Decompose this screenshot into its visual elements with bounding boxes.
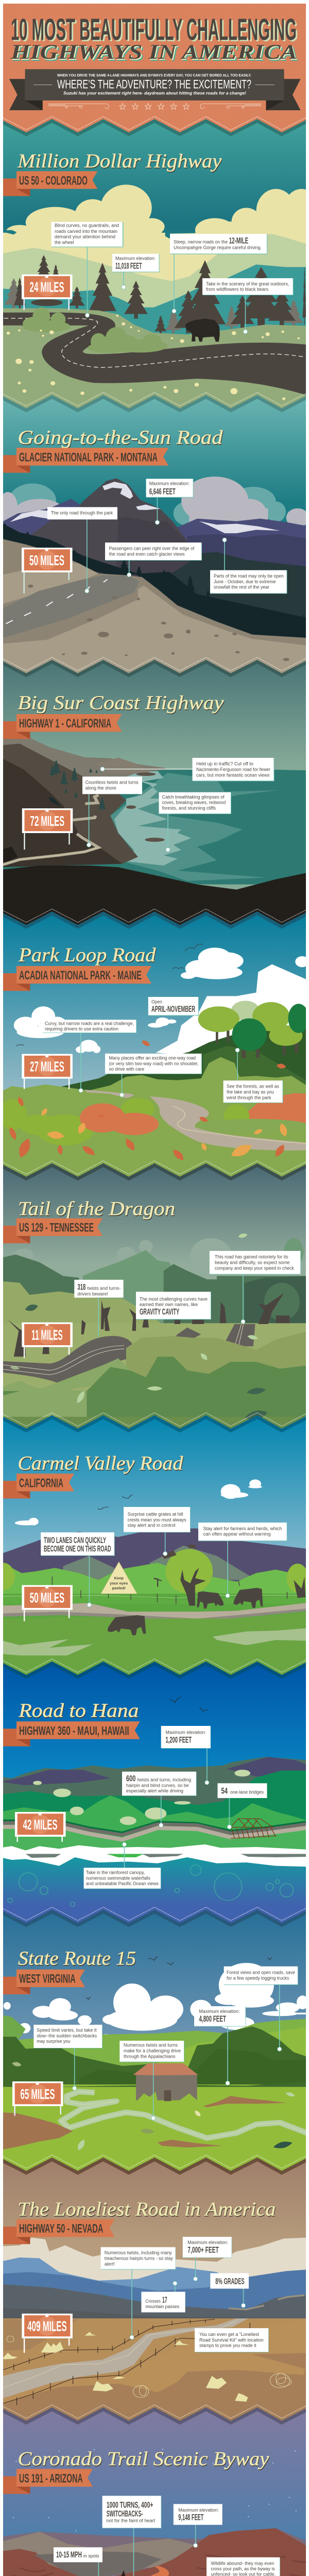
scene: Arizona canyon at dusk	[0, 2449, 309, 2576]
callout: maximum elevation 9,148 feet: 9,148 FEET	[178, 2513, 203, 2522]
panel: Carmel Valley Road	[0, 1453, 309, 1704]
sign: 409 miles	[22, 2313, 73, 2353]
callout: see the forests	[224, 1048, 283, 1103]
banner: Highway 360 - Maui, Hawaii	[3, 1721, 140, 1747]
title	[10, 19, 298, 61]
callout: 600 twists: hairpin and blind curves, so be	[126, 1783, 189, 1788]
callout: gravity cavity	[136, 1292, 211, 1319]
callout: 1000 turns: SWITCHBACKS-	[107, 2509, 143, 2518]
callout: cattle grates: crests mean you must always	[128, 1517, 186, 1522]
callout: blind curves: Blind curves, no guardrails, and	[55, 223, 119, 228]
banner: West Virginia: WEST VIRGINIA	[19, 1972, 76, 1986]
callout: one-way road	[105, 1054, 202, 1097]
callout: blind curves: roads carved into the mountain	[55, 229, 117, 234]
callout: survival kit: You can even get a “Loneliest	[199, 2332, 259, 2337]
panel: header	[3, 4, 306, 132]
callout: maximum elevation 4,800 feet: Maximum elevation:	[199, 2009, 240, 2014]
callout: maximum elevation 11,018 feet: 11,018 FEET	[115, 262, 142, 271]
sign: 24 miles: 24 MILES	[30, 279, 64, 295]
callout: steep narrow roads: Steep, narrow roads on the	[174, 240, 228, 245]
scene: Tennessee forest	[0, 1232, 309, 1485]
panel: Road to Hana	[0, 1697, 309, 2009]
callout: forest views	[224, 1967, 298, 2051]
callout: 600 twists: 600	[126, 1774, 135, 1783]
callout: maximum elevation 11,018 feet: Maximum elevation:	[115, 256, 156, 261]
heading: Million Dollar Highway: Million Dollar Highway	[17, 150, 222, 172]
callout: speed limit: slow--the sudden switchbacks	[37, 2033, 97, 2038]
callout: rainforest canopy: numerous swimmable waterfalls	[86, 1875, 150, 1880]
banner: US 191 - Arizona	[3, 2469, 93, 2494]
callout: speed limit: may surprise you	[37, 2039, 71, 2044]
panel: Million Dollar Highway	[0, 150, 309, 421]
callout: only road	[47, 507, 117, 593]
callout: maximum elevation 9,148 feet	[174, 2504, 222, 2548]
warning sign: keep your eyes peeled	[110, 1576, 128, 1590]
title: HIGHWAYS IN AMERICA	[10, 40, 297, 63]
callout: cattle grates	[124, 1507, 191, 1556]
callout: breathtaking glimpses: coves, breaking waves, redwood	[162, 800, 226, 805]
callout: maximum elevation 11,018 feet	[112, 254, 160, 289]
callout: see the forests: wind through the park	[226, 1095, 271, 1100]
icon: grazing cow	[234, 1588, 263, 1608]
callout: 1000 turns: 1000 TURNS, 400+	[107, 2500, 153, 2510]
flourish and stars	[48, 103, 261, 109]
callout: curvy narrow roads: Curvy, but narrow roads are a real challenge,	[45, 1021, 134, 1026]
callout: farmers and herds: Stay alert for farmers and herds, which	[203, 1526, 282, 1531]
callout: 17 mountain passes: 17	[162, 2295, 167, 2304]
callout: cattle grates: Surprise cattle grates at hill	[128, 1512, 183, 1517]
callout: passengers: Passengers can peer right over the edge of	[109, 546, 195, 551]
heading: Road to Hana: Road to Hana	[18, 1700, 139, 1722]
callout: 600 twists: especially alert while driving	[126, 1788, 183, 1793]
callout: 1000 turns	[102, 2496, 161, 2576]
callout: Nacimiento-Fergusson: cars, but more fantastic ocean views	[196, 772, 270, 777]
scene: Nevada	[0, 2238, 309, 2344]
scene: West Virginia	[0, 1956, 309, 2224]
heading: Park Loop Road: Park Loop Road	[19, 945, 157, 967]
icon: house	[133, 2063, 198, 2102]
callout: 8% grades: 8% GRADES	[215, 2277, 245, 2286]
heading: The Loneliest Road in America: The Loneliest Road in America	[18, 2199, 276, 2221]
callout: steep narrow roads: Uncompahgre Gorge require careful driving.	[174, 245, 262, 250]
callout: rainforest canopy	[84, 1842, 161, 1889]
scene: Glacier mountains	[3, 477, 306, 673]
callout: 54 bridges: one-lane bridges	[230, 1790, 264, 1795]
scene: Maui	[0, 1697, 309, 1932]
callout: blind curves	[52, 222, 124, 317]
ribbon banner	[9, 69, 301, 110]
banner: US 129 - Tennessee	[3, 1218, 102, 1243]
heading: The Loneliest Road in America: The Loneliest Road in America	[18, 2199, 276, 2221]
banner: California	[3, 1473, 74, 1499]
callout: 54 bridges	[217, 1783, 267, 1829]
callout: steep narrow roads	[170, 234, 267, 313]
scene: California coast	[3, 738, 306, 925]
warning sign: keep your eyes peeled: peeled!	[112, 1586, 126, 1590]
callout: notoriety	[210, 1251, 301, 1324]
callout: notoriety: This road has gained notoriety for its	[215, 1255, 288, 1260]
scene: Carmel valley	[0, 1480, 309, 1704]
callout: maximum elevation 1,200 feet: 1,200 FEET	[166, 1735, 192, 1744]
callout: hairpin turns: Numerous twists, including many	[105, 2250, 172, 2256]
heading: Tail of the Dragon: Tail of the Dragon	[19, 1199, 176, 1221]
callout: maximum elevation 4,800 feet: 4,800 FEET	[199, 2014, 226, 2024]
icon: cow	[197, 1591, 224, 1608]
callout: speed limit: Speed limit varies, but take it	[37, 2027, 97, 2032]
heading: Coronado Trail Scenic Byway: Coronado Trail Scenic Byway	[18, 2448, 269, 2470]
sign: 50 miles carmel	[22, 1585, 73, 1621]
banner: Glacier National Park - Montana	[3, 448, 168, 473]
callout: wildlife: cross your path, as the byway is	[211, 2566, 275, 2571]
panel: Coronado Trail Scenic Byway	[0, 2448, 309, 2576]
callout: countless twists: along the shore	[85, 785, 116, 790]
callout: maximum elevation 7,000+ feet	[183, 2237, 232, 2281]
callout: open April-November: APRIL-NOVEMBER	[151, 1005, 195, 1014]
callout: maximum elevation 4,800 feet	[194, 2006, 246, 2085]
callout: 318 twists: 318	[77, 1282, 85, 1292]
warning sign: keep your eyes peeled: Keep	[114, 1576, 124, 1581]
callout: rainforest canopy: and unbeatable Pacific Ocean views	[86, 1881, 159, 1886]
callout: 8% grades	[210, 2273, 249, 2308]
sign: 27 miles	[22, 1054, 73, 1089]
callout: maximum elevation 7,000+ feet: Maximum elevation:	[187, 2240, 228, 2245]
banner: US 50 - Colorado	[3, 171, 97, 196]
callout: notoriety: beauty and difficulty, so expect some	[215, 1260, 289, 1265]
banner: Glacier National Park - Montana: GLACIER NATIONAL PARK - MONTANA	[19, 450, 158, 464]
heading: Coronado Trail Scenic Byway: Coronado Trail Scenic Byway	[18, 2449, 270, 2471]
callout: parts of the road: June - October, due to extreme	[214, 579, 276, 584]
callout: numerous twists: make for a challenging drive	[124, 2048, 181, 2054]
callout: 318 twists: drivers beware!	[77, 1291, 108, 1296]
callout: see the forests: the lake and bay as you	[227, 1090, 274, 1095]
callout: gravity cavity: GRAVITY CAVITY	[140, 1308, 179, 1317]
callout: 17 mountain passes: mountain passes	[145, 2304, 180, 2309]
callout: Nacimiento-Fergusson: Nacimiento-Fergusson road for fewer	[196, 767, 270, 772]
callout: speed limit	[33, 2025, 102, 2090]
scene: Colorado mountains	[0, 184, 309, 421]
callout: two lanes	[41, 1532, 115, 1607]
icon: deer	[105, 2570, 129, 2576]
sign: 42 miles	[15, 1812, 66, 1842]
callout: numerous twists: through the Appalachians	[124, 2054, 176, 2059]
callout: 17 mountain passes	[141, 2281, 185, 2312]
callout: parts of the road: snowfall the rest of the year	[214, 585, 269, 590]
banner: Acadia National Park - Maine	[3, 966, 151, 991]
callout: parts of the road: Parts of the road may only be open	[214, 573, 284, 579]
panel: Going-to-the-Sun Road	[3, 430, 306, 673]
panel: The Loneliest Road in America	[0, 2199, 309, 2456]
heading: State Route 15: State Route 15	[18, 1947, 136, 1969]
callout: 600 twists	[122, 1772, 197, 1827]
heading: Carmel Valley Road: Carmel Valley Road	[18, 1453, 184, 1475]
callout: only road: The only road through the park	[51, 511, 113, 516]
callout: two lanes: BECOME ONE ON THIS ROAD	[44, 1545, 111, 1554]
callout: hairpin turns: treacherous hairpin turns - so stay	[105, 2256, 173, 2261]
banner: West Virginia	[3, 1970, 85, 1994]
callout: parts of the road	[210, 538, 287, 594]
sign: 11 miles: 11 MILES	[31, 1327, 63, 1343]
callout: wildlife	[207, 2557, 280, 2576]
callout: passengers: the road and even catch glacier views	[109, 551, 185, 556]
heading: Big Sur Coast Highway: Big Sur Coast Highway	[18, 692, 224, 714]
sign: 42 miles: 42 MILES	[23, 1817, 58, 1833]
callout: maximum elevation 7,000+ feet: 7,000+ FEET	[187, 2245, 219, 2255]
callout: passengers	[105, 543, 202, 577]
callout: cattle grates: stay alert and in control	[128, 1523, 176, 1528]
callout: maximum elevation 9,148 feet: Maximum elevation:	[178, 2507, 219, 2513]
callout: 318 twists	[74, 1280, 124, 1337]
heading: State Route 15: State Route 15	[19, 1948, 136, 1970]
callout: forest views: Forest views and open roads, save	[227, 1970, 295, 1975]
ribbon banner: WHEN YOU DRIVE THE SAME 4-LANE HIGHWAYS AND BYWAYS EVERY DAY, YOU CAN GET BORED ALL TOO EASILY.	[57, 73, 251, 77]
callout: one-way road: (or very slim two-way road) with no shoulder,	[109, 1061, 199, 1066]
callout: maximum elevation 6,646 feet: 6,646 FEET	[149, 487, 176, 496]
callout: open April-November: Open	[151, 999, 162, 1004]
sign: 50 miles: 50 MILES	[29, 552, 64, 568]
callout: two lanes: TWO LANES CAN QUICKLY	[44, 1536, 106, 1545]
heading: Carmel Valley Road: Carmel Valley Road	[18, 1453, 183, 1475]
callout: maximum elevation 1,200 feet: Maximum elevation:	[166, 1730, 206, 1735]
panel: Park Loop Road	[0, 944, 309, 1185]
callout: scenery: Take in the scenery of the great outdoors,	[206, 281, 289, 286]
callout: blind curves: demand your attention behind	[55, 234, 115, 240]
title: HIGHWAYS IN AMERICA	[12, 42, 299, 65]
panel: Big Sur Coast Highway	[3, 696, 306, 925]
banner: US 191 - Arizona: US 191 - ARIZONA	[19, 2471, 83, 2485]
heading: Road to Hana: Road to Hana	[19, 1701, 139, 1722]
callout: breathtaking glimpses: Catch breathtaking glimpses of	[162, 794, 225, 800]
callout: gravity cavity: The most challenging curves have	[140, 1296, 208, 1301]
callout: survival kit	[195, 2328, 269, 2352]
callout: notoriety: company and keep your speed in check	[215, 1265, 294, 1270]
callout: 17 mountain passes: Crosses	[145, 2298, 161, 2303]
callout: one-way road: Many places offer an exciting one-way road	[109, 1055, 196, 1060]
sign: 50 miles	[22, 548, 72, 594]
sign: 27 miles: 27 MILES	[30, 1059, 64, 1075]
callout: 10-15 mph	[54, 2547, 102, 2576]
callout: open April-November	[148, 997, 199, 1016]
sign: 50 miles carmel: 50 MILES	[30, 1590, 64, 1606]
heading: Big Sur Coast Highway: Big Sur Coast Highway	[18, 693, 225, 715]
callout: see the forests: See the forests, as well as	[227, 1084, 279, 1089]
callout: breathtaking glimpses: forests, and stunning cliffs	[162, 806, 216, 811]
banner: Acadia National Park - Maine: ACADIA NATIONAL PARK - MAINE	[19, 969, 142, 982]
banner: Highway 1 - California: HIGHWAY 1 - CALIFORNIA	[19, 717, 111, 731]
callout: farmers and herds: can often appear without warning	[203, 1532, 270, 1537]
callout: 54 bridges: 54	[221, 1787, 228, 1796]
sign: 24 miles	[22, 274, 72, 310]
callout: 600 twists: twists and turns, including	[138, 1777, 191, 1782]
callout: survival kit: Road Survival Kit” with location	[199, 2337, 264, 2343]
icon: black bear	[185, 318, 220, 342]
callout: rainforest canopy: Take in the rainforest canopy,	[86, 1870, 145, 1875]
heading: Going-to-the-Sun Road: Going-to-the-Sun Road	[18, 428, 224, 449]
sign: 11 miles	[22, 1322, 73, 1358]
callout: survival kit: stamps to prove you made it	[199, 2343, 256, 2348]
callout: maximum elevation 6,646 feet: Maximum elevation:	[149, 481, 190, 486]
sign: 72 miles: 72 MILES	[30, 813, 64, 829]
heading: Park Loop Road: Park Loop Road	[18, 944, 156, 966]
callout: scenery	[202, 278, 294, 334]
callout: countless twists: Countless twists and turns	[85, 780, 139, 785]
callout: Nacimiento-Fergusson	[100, 758, 274, 781]
callout: gravity cavity: earned their own names, like	[140, 1302, 198, 1307]
callout: Nacimiento-Fergusson: Held up in traffic? Cut off to	[196, 761, 253, 767]
scene: Acadia autumn	[0, 944, 309, 1185]
banner: US 129 - Tennessee: US 129 - TENNESSEE	[19, 1221, 94, 1235]
callout: scenery: from wildflowers to black bears	[206, 287, 268, 292]
callout: 10-15 mph: in spots	[83, 2553, 99, 2558]
icon: bridge	[231, 1819, 276, 1838]
icon: foreground cow	[108, 1615, 146, 1635]
banner: Highway 50 - Nevada: HIGHWAY 50 - NEVADA	[19, 2222, 104, 2236]
warning sign: keep your eyes peeled: your eyes	[110, 1581, 128, 1586]
callout: maximum elevation 6,646 feet	[146, 479, 194, 524]
callout: 10-15 mph: 10-15 MPH	[56, 2550, 82, 2560]
callout: 318 twists: twists and turns-	[88, 1285, 121, 1291]
callout: 1000 turns: not for the faint of heart	[107, 2518, 156, 2523]
panel: Tail of the Dragon	[0, 1198, 309, 1485]
sign: 65 miles: 65 MILES	[21, 2086, 55, 2102]
heading: Tail of the Dragon: Tail of the Dragon	[18, 1198, 175, 1219]
banner: Highway 360 - Maui, Hawaii: HIGHWAY 360 - MAUI, HAWAII	[19, 1724, 129, 1738]
sign: 65 miles	[12, 2081, 63, 2116]
callout: numerous twists: Numerous twists and turns	[124, 2043, 178, 2048]
banner: California: CALIFORNIA	[19, 1476, 63, 1490]
callout: curvy narrow roads	[42, 1020, 136, 1093]
callout: hairpin turns	[101, 2247, 176, 2340]
callout: one-way road: so drive with care	[109, 1066, 144, 1072]
sign: 409 miles: 409 MILES	[27, 2318, 67, 2334]
callout: numerous twists	[119, 2041, 184, 2120]
callout: hairpin turns: alert!	[105, 2261, 115, 2266]
callout: breathtaking glimpses	[159, 792, 231, 852]
callout: countless twists	[82, 776, 142, 847]
ribbon banner: Suzuki has your excitement right here- daydream about hitting these roads for a change!	[63, 90, 246, 95]
banner: US 50 - Colorado: US 50 - COLORADO	[19, 174, 88, 188]
callout: maximum elevation 1,200 feet	[161, 1726, 211, 1785]
panel: State Route 15	[0, 1947, 309, 2224]
sign: 72 miles	[22, 808, 73, 850]
heading: Going-to-the-Sun Road: Going-to-the-Sun Road	[18, 427, 224, 449]
callout: blind curves: the wheel	[55, 240, 74, 245]
callout: forest views: for a few speedy logging trucks	[227, 1976, 289, 1981]
banner: Highway 1 - California	[3, 714, 122, 739]
heading: Million Dollar Highway: Million Dollar Highway	[18, 151, 222, 173]
callout: steep narrow roads: 12-MILE	[229, 236, 248, 246]
callout: curvy narrow roads: requiring drivers to use extra caution	[45, 1026, 118, 1031]
scene: ocean	[0, 1844, 309, 2009]
callout: farmers and herds	[198, 1522, 287, 1598]
banner: Highway 50 - Nevada	[3, 2219, 115, 2244]
title: HIGHWAYS IN AMERICA	[11, 41, 298, 64]
callout: wildlife: Wildlife abound- they may even	[211, 2561, 274, 2566]
